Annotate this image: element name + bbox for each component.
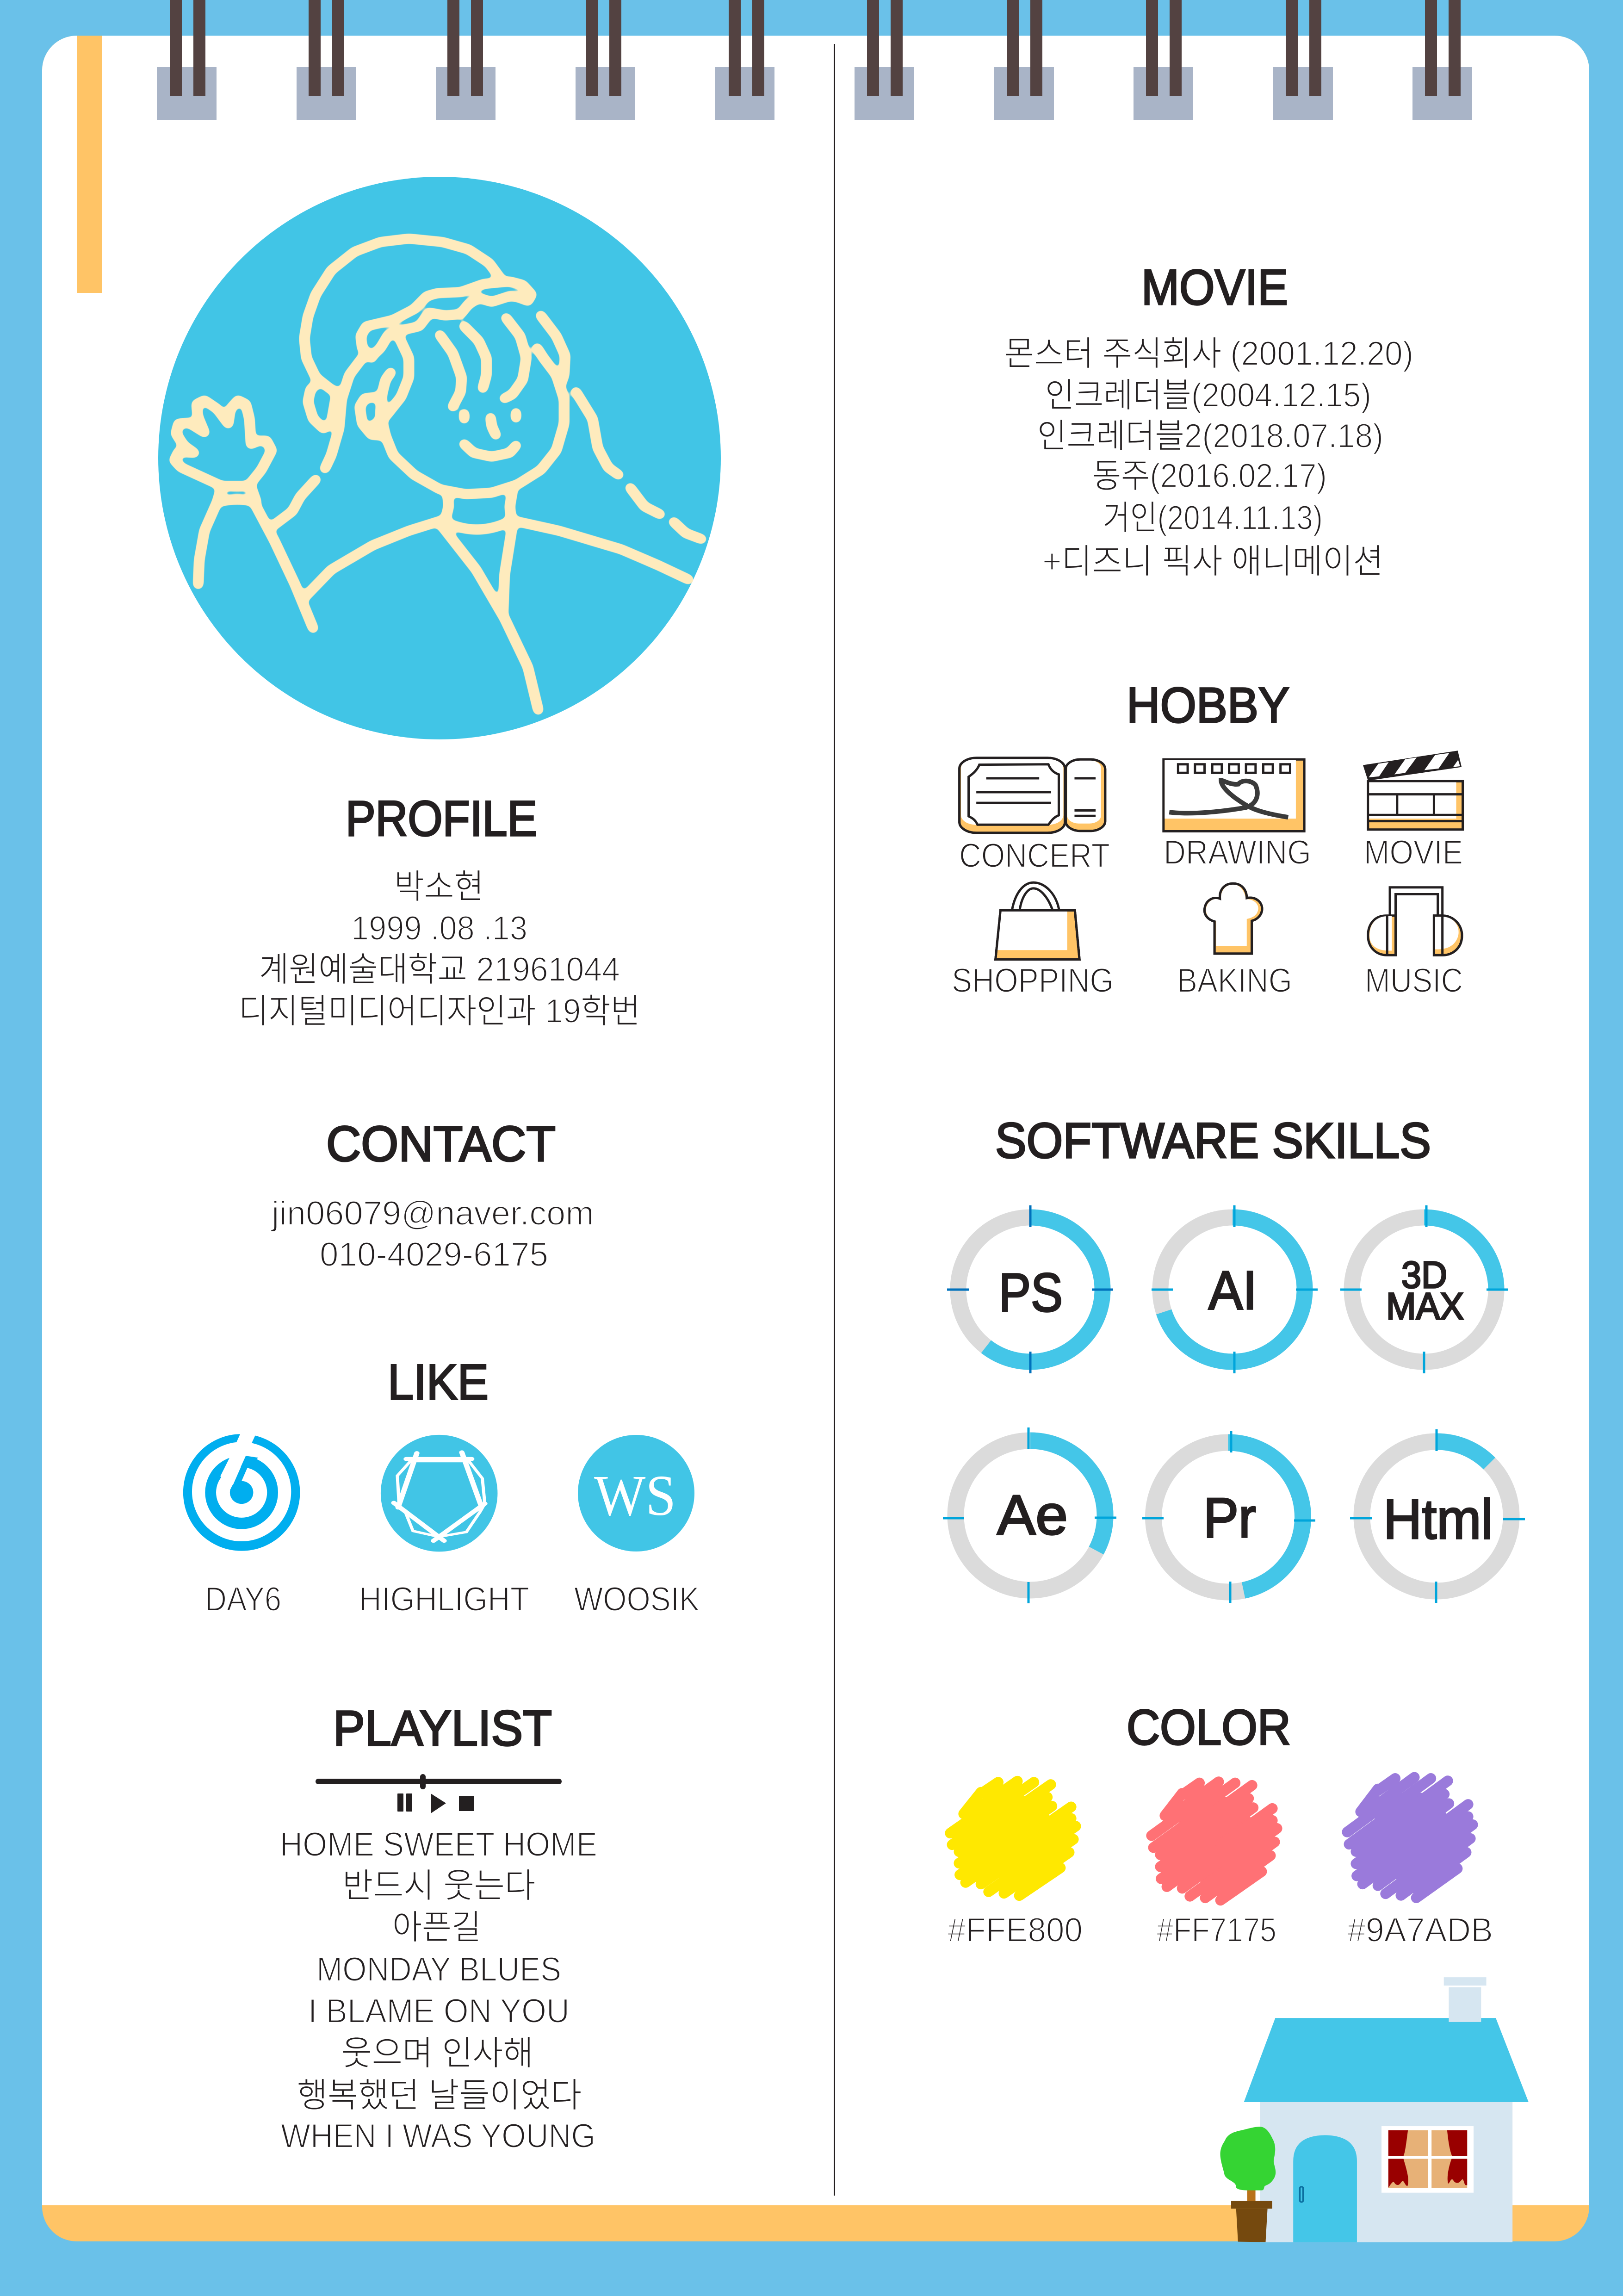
profile details: 박소현	[394, 868, 484, 906]
hobby labels: DRAWING	[1164, 834, 1311, 871]
heading: contact: CONTACT	[326, 1116, 556, 1172]
panel: movie	[1004, 259, 1413, 580]
skill ring: 3D MAX: 3D	[1401, 1254, 1447, 1296]
icon: woosik logo	[578, 1435, 694, 1551]
swatch: purple scribble	[1347, 1777, 1473, 1898]
movie list: 동주(2016.02.17)	[1092, 457, 1327, 495]
panel: profile	[239, 790, 640, 1030]
heading: color: COLOR	[1127, 1699, 1291, 1755]
skill ring: PS	[947, 1205, 1113, 1373]
music player controls	[316, 1774, 562, 1813]
skill ring: PS: PS	[999, 1262, 1063, 1323]
bookmark tab	[77, 36, 102, 293]
spiral binding	[157, 0, 1472, 120]
movie list	[1004, 335, 1413, 580]
playlist tracks	[280, 1826, 597, 2155]
heading: software skills: SOFTWARE SKILLS	[995, 1112, 1431, 1168]
playlist tracks: 행복했던 날들이었다	[297, 2077, 582, 2114]
hobby labels: MUSIC	[1365, 962, 1463, 999]
hobby labels: SHOPPING	[952, 962, 1114, 999]
playlist tracks: MONDAY BLUES	[316, 1951, 561, 1988]
profile details: 계원예술대학교 21961044	[259, 951, 620, 988]
movie list: 인크레더블(2004.12.15)	[1045, 377, 1371, 414]
house illustration	[1220, 1977, 1529, 2242]
playlist tracks: 웃으며 인사해	[341, 2035, 533, 2072]
playlist tracks: HOME SWEET HOME	[280, 1826, 597, 1863]
roof	[1244, 2018, 1529, 2102]
movie list: 거인(2014.11.13)	[1103, 499, 1323, 537]
hobby labels: BAKING	[1177, 962, 1292, 999]
skill ring: AI: AI	[1208, 1260, 1257, 1321]
profile details: 디지털미디어디자인과 19학번	[239, 993, 640, 1030]
panel: software skills	[943, 1112, 1525, 1603]
like labels: WOOSIK	[574, 1581, 700, 1618]
panel: contact	[271, 1116, 594, 1273]
heading: movie: MOVIE	[1141, 259, 1288, 315]
playlist tracks: 아픈길	[392, 1909, 481, 1946]
colour hex labels: #FFE800	[948, 1911, 1083, 1949]
icon: headphones	[1368, 887, 1462, 955]
panel: hobby	[952, 677, 1463, 999]
colour hex labels	[948, 1911, 1493, 1949]
hobby labels: MOVIE	[1364, 834, 1463, 871]
colour hex labels: #FF7175	[1157, 1911, 1276, 1949]
swatch: coral scribble	[1152, 1782, 1277, 1900]
profile details	[239, 868, 640, 1030]
house wall	[1260, 2102, 1512, 2242]
skill ring: AI	[1152, 1205, 1318, 1373]
like labels: DAY6	[205, 1581, 281, 1618]
contact details	[271, 1195, 594, 1273]
movie list: 몬스터 주식회사 (2001.12.20)	[1004, 335, 1413, 372]
icon: clapperboard	[1363, 751, 1463, 830]
icon: highlight logo	[381, 1435, 497, 1551]
column divider	[834, 44, 835, 2196]
door	[1293, 2135, 1357, 2242]
skill ring: Pr	[1142, 1431, 1315, 1603]
playlist tracks: I BLAME ON YOU	[308, 1992, 570, 2030]
contact details: 010-4029-6175	[320, 1236, 548, 1273]
icon: sketchbook	[1164, 759, 1304, 832]
skill ring: Html: Html	[1383, 1488, 1493, 1551]
profile details: 1999 .08 .13	[351, 910, 527, 947]
skill ring: 3D MAX	[1340, 1205, 1508, 1373]
playlist tracks: WHEN I WAS YOUNG	[281, 2117, 595, 2155]
panel: color	[948, 1699, 1493, 1949]
icon: day6 logo	[183, 1433, 300, 1551]
icon: chef hat	[1204, 883, 1262, 954]
heading: hobby: HOBBY	[1127, 677, 1289, 733]
hobby labels: CONCERT	[959, 837, 1110, 875]
skill ring: Pr: Pr	[1203, 1486, 1256, 1549]
icon: concert ticket	[960, 758, 1105, 833]
heading: profile: PROFILE	[346, 790, 537, 846]
window	[1381, 2126, 1474, 2193]
potted tree	[1220, 2127, 1276, 2242]
chimney stack	[1449, 1987, 1481, 2022]
panel: playlist	[280, 1700, 597, 2155]
chimney cap	[1444, 1977, 1487, 1986]
contact details: jin06079@naver.com	[271, 1195, 594, 1232]
colour hex labels: #9A7ADB	[1347, 1911, 1493, 1949]
icon: shopping bag	[996, 882, 1079, 959]
skill ring: 3D MAX: MAX	[1386, 1285, 1464, 1328]
heading: like: LIKE	[388, 1354, 489, 1410]
like labels: HIGHLIGHT	[359, 1581, 529, 1618]
movie list: +디즈니 픽사 애니메이션	[1042, 543, 1383, 580]
hobby labels	[952, 834, 1463, 999]
profile portrait illustration	[158, 177, 721, 739]
like labels	[205, 1581, 700, 1618]
skill ring: Ae	[943, 1427, 1116, 1603]
skill ring: Html	[1350, 1429, 1525, 1603]
panel: like	[183, 1354, 700, 1618]
movie list: 인크레더블2(2018.07.18)	[1037, 417, 1383, 455]
playlist tracks: 반드시 웃는다	[342, 1867, 535, 1905]
swatch: yellow scribble	[950, 1781, 1076, 1896]
skill ring: Ae: Ae	[997, 1483, 1068, 1546]
heading: playlist: PLAYLIST	[333, 1700, 552, 1756]
icon: woosik logo: WS	[594, 1464, 676, 1528]
